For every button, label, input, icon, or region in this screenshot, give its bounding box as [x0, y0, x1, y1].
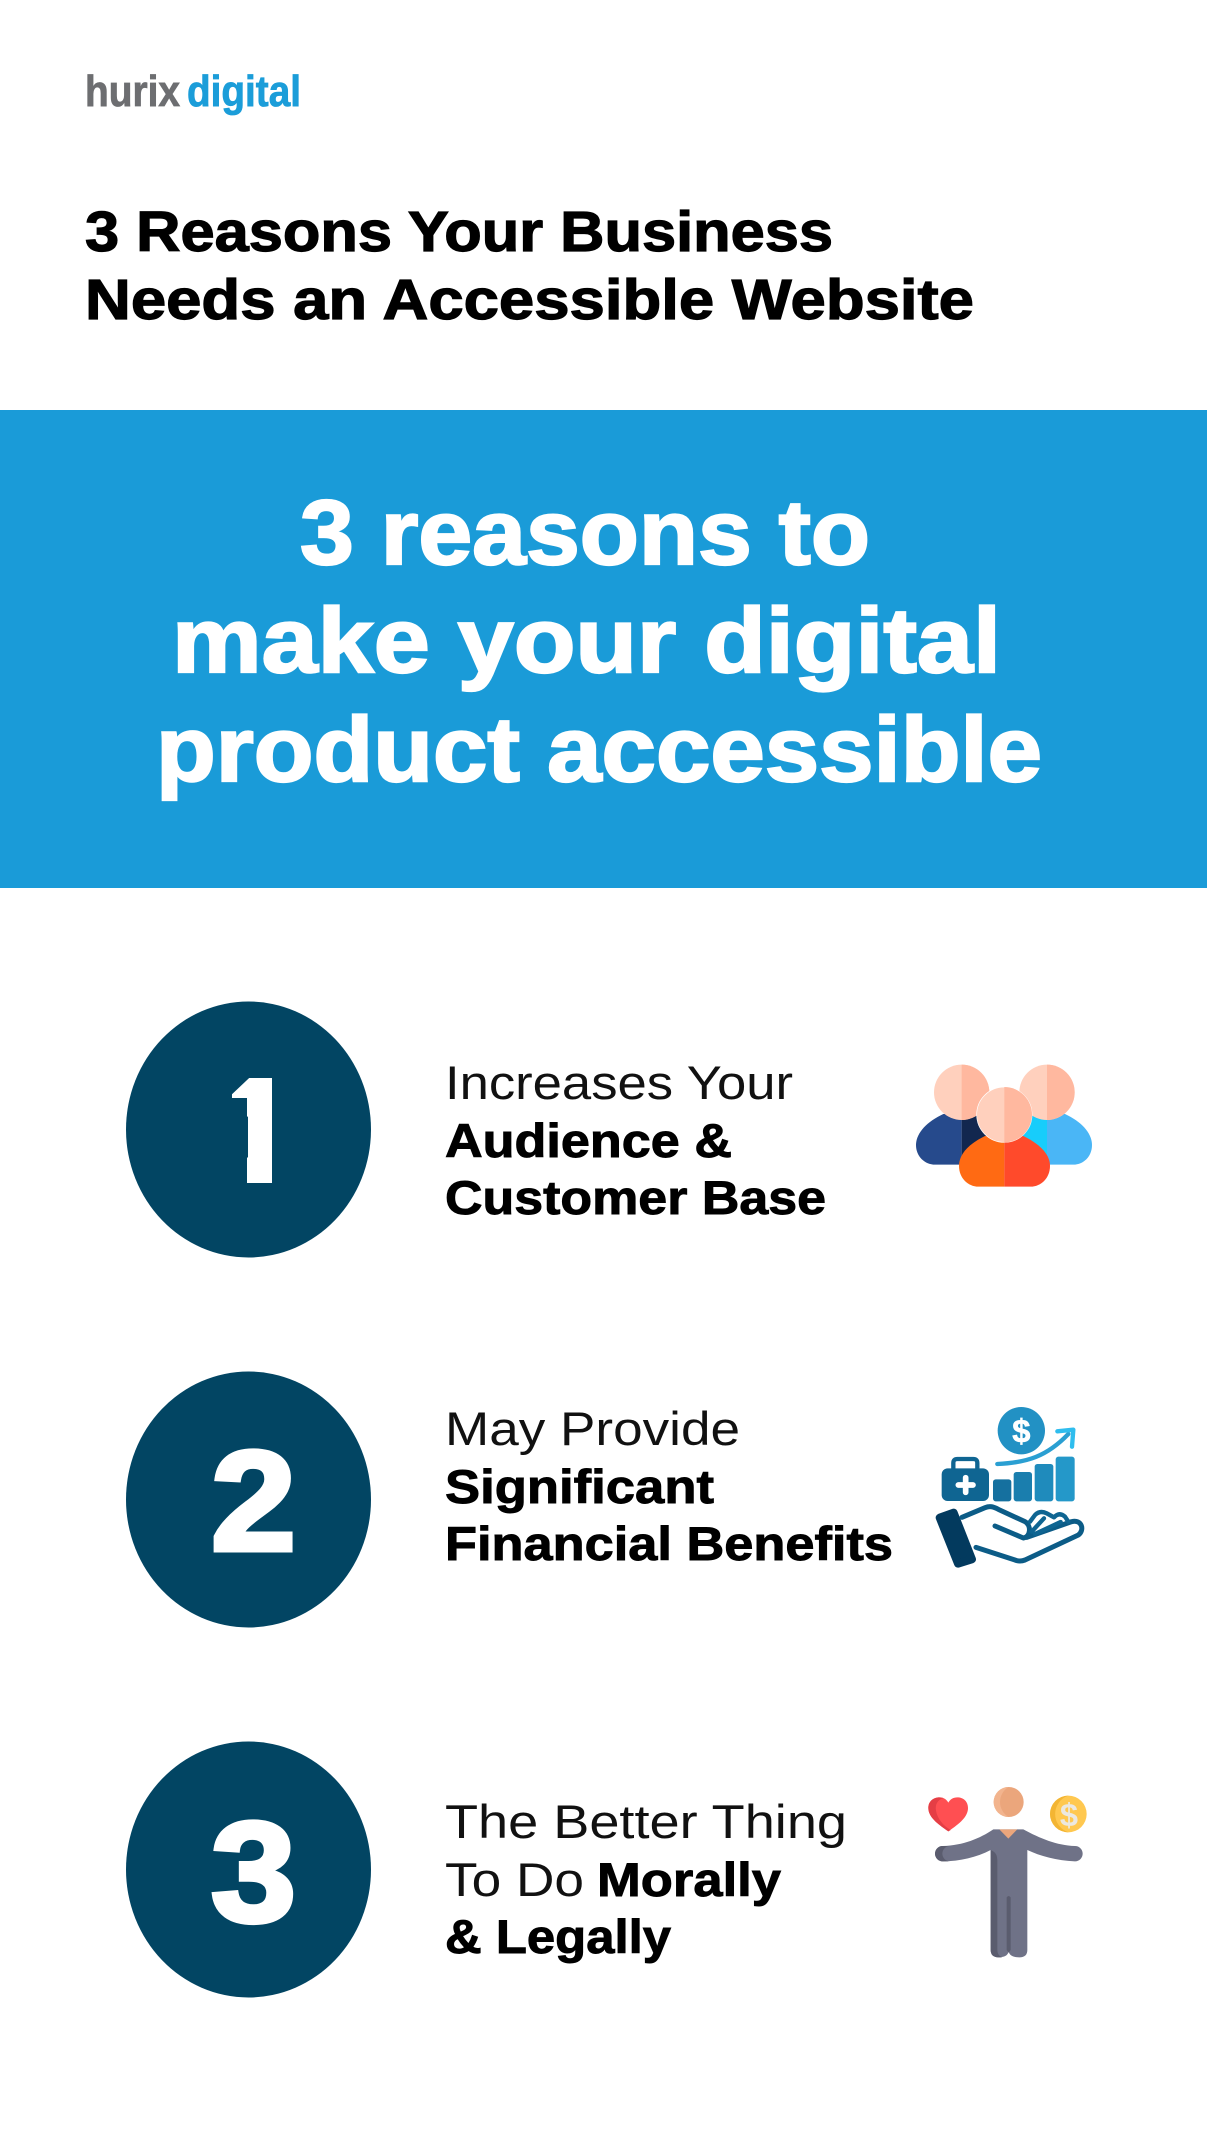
reason 2 — [126, 1372, 1082, 1628]
banner heading: 3 reasons to — [300, 482, 870, 584]
title: Needs an Accessible Website — [85, 268, 974, 332]
number badge 3: 3 — [211, 1793, 296, 1952]
reason 3 — [126, 1742, 1087, 1998]
reason 2 text: Financial Benefits — [445, 1517, 893, 1570]
number badge 3 — [126, 1742, 371, 1998]
reason 3 text — [445, 1795, 847, 1963]
title: 3 Reasons Your Business — [85, 200, 833, 264]
reason 1 — [126, 1002, 1092, 1258]
icon: people group — [916, 1065, 1092, 1187]
reason 1 text: Customer Base — [445, 1171, 826, 1224]
icon: person balancing heart and coin — [928, 1787, 1087, 1957]
reason 1 text: Audience & — [445, 1114, 732, 1167]
banner heading: make your digital — [172, 590, 1001, 692]
banner heading — [156, 482, 1042, 801]
title — [85, 200, 974, 332]
reason 2 text: May Provide — [445, 1402, 740, 1455]
number badge 1: 1 — [232, 1053, 286, 1212]
icon: financial benefits hand: $ — [1012, 1412, 1030, 1449]
logo: hurix digital: digital — [187, 67, 301, 116]
logo: hurix digital — [85, 67, 301, 116]
reason 3 text: & Legally — [445, 1910, 671, 1963]
banner — [0, 410, 1207, 888]
icon: person balancing heart and coin: $ — [1060, 1796, 1078, 1833]
reason 3 text: The Better Thing — [445, 1795, 847, 1848]
reason 3 text: To Do — [445, 1853, 584, 1906]
reason 1 text — [445, 1056, 826, 1224]
number badge 2 — [126, 1372, 371, 1628]
reason 2 text: Significant — [445, 1460, 714, 1513]
reason 1 text: Increases Your — [445, 1056, 793, 1109]
reason 2 text — [445, 1402, 893, 1570]
icon: financial benefits hand — [940, 1407, 1082, 1564]
number badge 1 — [126, 1002, 371, 1258]
reason 3 text: Morally — [597, 1853, 781, 1906]
banner heading: product accessible — [156, 699, 1042, 801]
logo: hurix digital: hurix — [85, 67, 180, 116]
number badge 2: 2 — [211, 1422, 296, 1581]
